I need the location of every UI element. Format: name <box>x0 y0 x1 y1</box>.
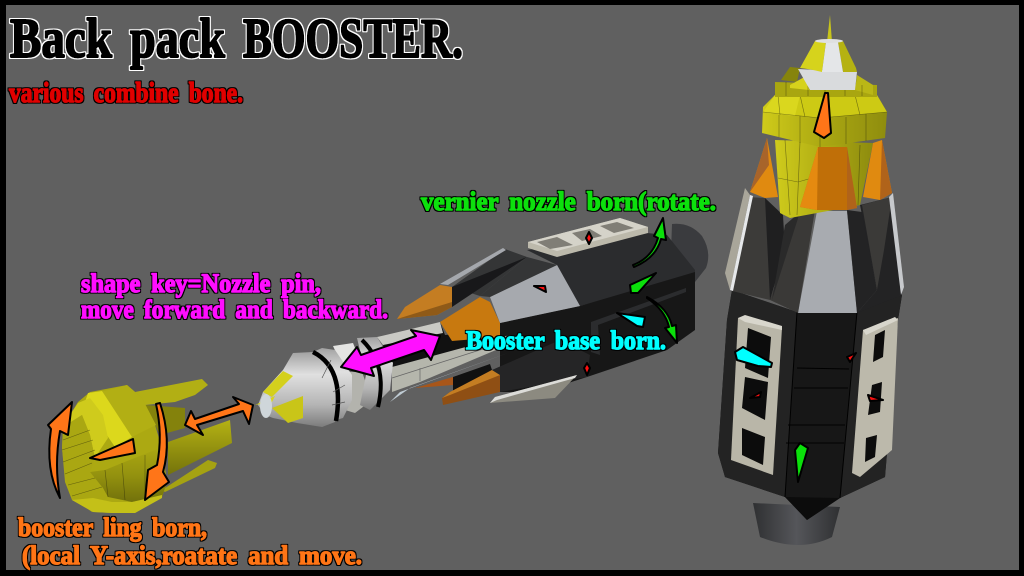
middle dark prong <box>145 405 185 435</box>
arrow: orange double <box>185 397 253 435</box>
orange nozzle shrouds <box>750 138 778 198</box>
label: shape key: shape key=Nozzle pin, <box>81 269 321 298</box>
threaded neck <box>345 372 372 413</box>
silver panel <box>490 265 580 323</box>
bone: top orange <box>814 93 831 138</box>
title: BOOSTER. <box>243 8 463 70</box>
second ring <box>357 337 393 410</box>
upper barrel <box>100 385 156 438</box>
label: booster base: Booster base born. <box>466 326 666 355</box>
arrow: green curve down <box>647 297 677 343</box>
lower black hull <box>500 272 695 392</box>
black band on nozzle <box>313 352 338 421</box>
rim <box>63 398 108 458</box>
black gap behind shaft <box>383 322 510 367</box>
bone: red markers on rocket <box>750 353 883 401</box>
upper collar <box>775 82 877 97</box>
bone: red markers on middle booster <box>534 232 592 375</box>
bright band <box>84 391 132 447</box>
dark wedges <box>770 207 815 313</box>
bone: middle green <box>630 273 656 293</box>
left window frame <box>731 318 782 475</box>
lower prong <box>168 420 232 475</box>
label: booster ring: (local Y-axis,roatate and move. <box>22 541 362 570</box>
subtitle: various combine bone. <box>9 78 243 109</box>
white ring band <box>798 69 857 90</box>
title: pack <box>130 8 226 70</box>
lower dark wedge <box>492 340 590 392</box>
label: vernier nozzle: vernier nozzle born(rotate. <box>421 187 716 216</box>
right window frame <box>852 318 898 477</box>
bottom prong <box>162 460 217 492</box>
central silver panel <box>798 211 857 313</box>
side slivers <box>725 188 750 290</box>
interior <box>62 415 108 512</box>
bone: side cyan <box>735 347 772 367</box>
rear nozzle <box>670 224 708 282</box>
ring outer body <box>62 385 167 513</box>
bone markers and arrows <box>48 93 883 500</box>
top prong <box>135 379 208 405</box>
yellow prongs behind ring <box>775 140 873 218</box>
nose cone <box>800 41 826 72</box>
rocket: right upright booster <box>718 15 904 545</box>
orange prongs <box>397 285 452 319</box>
arrow: green curve up <box>633 218 666 267</box>
bone: middle cyan <box>617 313 645 327</box>
bone: ring orange <box>90 439 135 460</box>
bone: side green <box>795 443 808 482</box>
bottom lip <box>72 495 162 513</box>
lower body <box>718 290 902 520</box>
label: shape key <box>81 269 388 324</box>
nozzle cone <box>258 352 336 427</box>
upper dark wedge <box>452 249 527 296</box>
yellow booster ring <box>62 379 232 513</box>
lower barrel <box>90 448 167 502</box>
window panel <box>528 218 648 257</box>
arrow: magenta double <box>341 330 440 376</box>
rail slot <box>591 288 686 355</box>
exhaust dome <box>753 503 840 545</box>
upper dark hull <box>527 233 695 306</box>
title: Back <box>10 8 113 70</box>
arrow: orange curve right <box>145 403 169 500</box>
top ring <box>762 95 887 147</box>
silver shaft <box>392 335 515 392</box>
label: booster ring: booster ling born, <box>18 513 207 542</box>
arrow: orange curve left <box>48 402 72 498</box>
lower silver sliver <box>490 375 577 403</box>
white rear collar <box>333 343 360 372</box>
title <box>10 8 463 70</box>
label: booster ring <box>18 513 362 570</box>
label: shape key: move forward and backward. <box>81 295 388 324</box>
first ring band <box>313 348 352 427</box>
middle booster body <box>255 218 708 427</box>
